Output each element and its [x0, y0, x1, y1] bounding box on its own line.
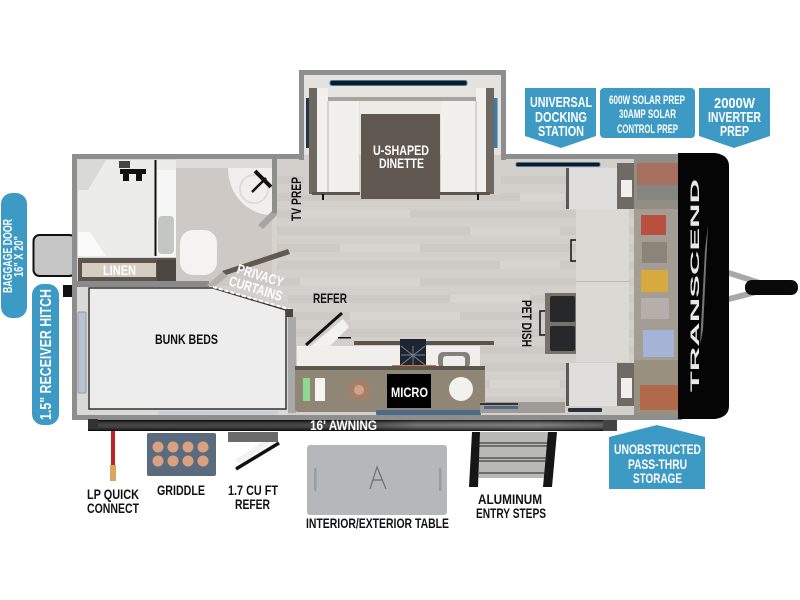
callout: receiver hitch: 1.5" RECEIVER HITCH	[38, 289, 55, 420]
icon: faucet	[252, 171, 271, 192]
icon: rear window	[78, 312, 86, 393]
bathroom sink	[228, 168, 272, 215]
label: bunk beds: BUNK BEDS	[155, 331, 218, 347]
towels	[158, 216, 174, 254]
bottom marble counter	[569, 363, 617, 406]
callout: inverter prep: PREP	[720, 123, 749, 140]
panel: trailer floor	[72, 154, 682, 420]
callout: universal docking station: UNIVERSAL	[530, 94, 592, 111]
label: micro: MICRO	[391, 384, 428, 400]
label: interior/exterior table: INTERIOR/EXTERIOR TABLE	[306, 515, 449, 531]
label: lp quick connect: CONNECT	[87, 500, 139, 516]
label: u-shaped dinette	[373, 142, 429, 171]
label: aluminum entry steps: ENTRY STEPS	[476, 505, 546, 521]
panel: pass-thru storage with snacks	[634, 159, 678, 415]
callout: inverter prep: 2000W	[714, 95, 756, 112]
icon: top window	[330, 80, 467, 86]
cabinet	[295, 366, 485, 412]
privacy curtain wall	[207, 272, 228, 287]
shower door	[154, 160, 156, 256]
callout: inverter prep	[699, 88, 770, 148]
top cabinet frame	[617, 163, 634, 209]
bench seat right	[441, 88, 486, 192]
dinette table	[361, 114, 440, 199]
label: u-shaped dinette: DINETTE	[379, 155, 424, 171]
privacy curtain rail	[222, 249, 290, 275]
panel: kitchen	[286, 309, 494, 415]
fridge light white	[315, 378, 325, 401]
fridge light green	[303, 378, 310, 401]
pet dish	[540, 293, 576, 354]
counter	[297, 346, 480, 367]
panel: bathroom	[77, 159, 277, 287]
label: 16' awning: 16' AWNING	[310, 417, 377, 433]
bench back left	[309, 88, 317, 194]
icon: baggage door	[34, 235, 76, 276]
label: lp quick connect	[87, 486, 139, 516]
icon: left side window	[306, 98, 309, 148]
top marble counter	[569, 168, 617, 209]
callout: solar prep: 600W SOLAR PREP	[609, 95, 685, 107]
callout: pass-thru storage	[609, 425, 705, 489]
callout: pass-thru storage: PASS-THRU	[628, 456, 687, 472]
entry door threshold	[480, 402, 602, 413]
callout: solar prep: 30AMP SOLAR	[619, 109, 676, 121]
awning	[88, 417, 617, 433]
bottom cabinet frame	[617, 363, 634, 406]
label: griddle: GRIDDLE	[157, 482, 205, 498]
kitchen window	[376, 410, 481, 415]
icon: shower fixture	[119, 161, 146, 181]
burner	[348, 379, 370, 401]
callout: receiver hitch	[32, 284, 59, 425]
bench back rear	[328, 87, 476, 101]
callout: baggage door	[1, 193, 27, 318]
label: aluminum entry steps: ALUMINUM	[478, 491, 542, 507]
round white fixture	[449, 377, 473, 401]
icon: griddle	[147, 433, 216, 476]
partition wall	[77, 281, 209, 287]
icon: lp quick connect hose	[110, 431, 116, 481]
icon: side window	[158, 411, 278, 414]
label: pet dish: PET DISH	[519, 300, 535, 347]
icon: right side window	[494, 98, 498, 148]
label: 1.7 cu ft refer: REFER	[235, 496, 270, 512]
callout: inverter prep: INVERTER	[708, 109, 761, 126]
linen closet	[78, 258, 176, 281]
refrigerator door	[311, 319, 349, 346]
label: lp quick connect: LP QUICK	[87, 486, 139, 502]
graphic swoosh	[700, 225, 708, 345]
label: privacy curtains: PRIVACY	[235, 261, 286, 290]
brand name: TRANSCEND	[688, 178, 702, 392]
callout: baggage door: BAGGAGE DOOR	[1, 219, 15, 293]
label: privacy curtains: CURTAINS	[227, 273, 284, 304]
label: refer: REFER	[313, 290, 347, 306]
stove	[400, 339, 426, 366]
curtain line	[213, 287, 292, 310]
sink	[438, 352, 470, 368]
panel: dinette slide-out	[299, 70, 506, 200]
front sofa	[576, 209, 629, 362]
toilet	[180, 230, 217, 275]
callout: pass-thru storage: UNOBSTRUCTED	[614, 441, 701, 457]
callout: baggage door: 16" X 20"	[12, 236, 26, 277]
icon: aluminum entry steps	[469, 432, 557, 487]
icon: front wall window	[516, 162, 600, 166]
icon: tow hitch	[729, 270, 798, 302]
label: 1.7 cu ft refer: 1.7 CU FT	[228, 482, 278, 498]
panel: front sofa and counters	[566, 163, 634, 406]
callout: universal docking station: DOCKING	[535, 109, 587, 126]
icon: interior/exterior table	[307, 445, 447, 515]
callout: solar prep	[600, 88, 695, 138]
label: u-shaped dinette: U-SHAPED	[373, 142, 429, 158]
bench back right	[486, 88, 494, 194]
label: 1.7 cu ft refer	[228, 482, 278, 512]
snack bags	[641, 215, 674, 357]
callout: solar prep: CONTROL PREP	[617, 124, 678, 136]
callout: universal docking station	[525, 88, 596, 148]
callout: pass-thru storage: STORAGE	[633, 470, 682, 486]
bench seat left	[317, 88, 359, 192]
callout: universal docking station: STATION	[538, 123, 584, 140]
panel: front cap	[678, 153, 729, 419]
label: tv prep: TV PREP	[288, 177, 304, 221]
label: privacy curtains	[227, 261, 286, 304]
icon: receiver hitch block	[63, 285, 72, 297]
microwave	[387, 374, 431, 408]
label: aluminum entry steps	[476, 491, 546, 521]
label: linen: LINEN	[103, 262, 136, 278]
icon: 1.7 cu ft refer	[228, 432, 279, 469]
mattress	[89, 288, 286, 409]
panel: bunk beds	[77, 287, 288, 415]
shower	[78, 160, 176, 257]
